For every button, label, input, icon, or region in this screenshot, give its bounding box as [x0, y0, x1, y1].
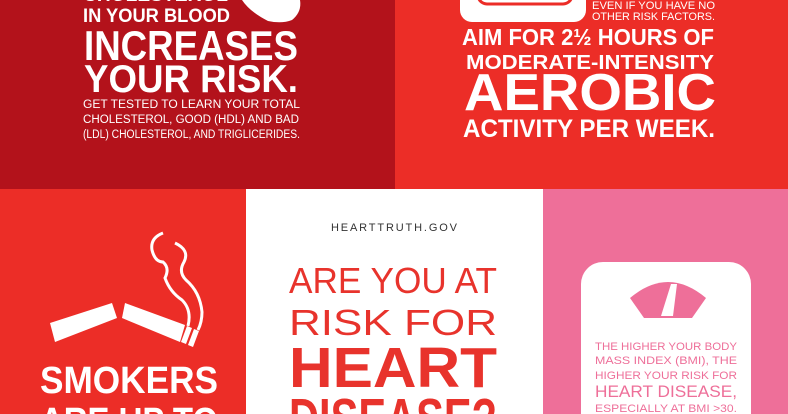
panel: BMI: [543, 189, 788, 414]
text: risk factors: EVEN IF YOU HAVE NO: [592, 0, 715, 12]
heading: cholesterol: INCREASES: [84, 22, 298, 69]
heading: aerobic: [462, 24, 716, 143]
heading: aerobic: MODERATE-INTENSITY: [466, 52, 715, 74]
icon: scale: [581, 262, 751, 414]
text: BMI: [595, 341, 738, 414]
panel: exercise: [395, 0, 788, 189]
heading: aerobic: AIM FOR 2½ HOURS OF: [462, 24, 714, 50]
heading: cholesterol: YOUR RISK.: [84, 58, 298, 101]
heading: smokers: SMOKERS: [40, 360, 218, 402]
heading: aerobic: ACTIVITY PER WEEK.: [463, 115, 715, 143]
text: BMI: HEART DISEASE,: [595, 382, 737, 401]
text: BMI: MASS INDEX (BMI), THE: [595, 355, 737, 367]
title: RISK FOR: [289, 302, 497, 343]
icon: cigarette: [50, 233, 202, 347]
text: cholesterol details: GET TESTED TO LEARN YOUR TOTAL: [83, 99, 301, 111]
text: BMI: HIGHER YOUR RISK FOR: [595, 370, 737, 382]
icon: shoe: [460, 0, 586, 22]
heading: cholesterol: IN YOUR BLOOD: [83, 6, 230, 27]
panel: title: [246, 189, 543, 414]
text: cholesterol details: CHOLESTEROL, GOOD (HDL) AND BAD: [83, 114, 299, 126]
text: risk factors: OTHER RISK FACTORS.: [592, 11, 715, 23]
title: HEART: [289, 336, 497, 400]
panel: cholesterol: [0, 0, 395, 189]
title: [289, 260, 497, 414]
panel: smoking: [0, 189, 246, 414]
text: risk factors: [592, 0, 715, 23]
text: cholesterol details: [83, 99, 301, 141]
icon: heart: [242, 0, 300, 22]
text: website: HEARTTRUTH.GOV: [331, 222, 458, 234]
text: BMI: THE HIGHER YOUR BODY: [595, 341, 738, 353]
text: cholesterol details: (LDL) CHOLESTEROL, AND TRIGLICERIDES.: [83, 129, 300, 141]
heading: cholesterol: [83, 0, 298, 101]
heading: aerobic: AEROBIC: [464, 64, 716, 122]
title: ARE YOU AT: [289, 260, 497, 301]
